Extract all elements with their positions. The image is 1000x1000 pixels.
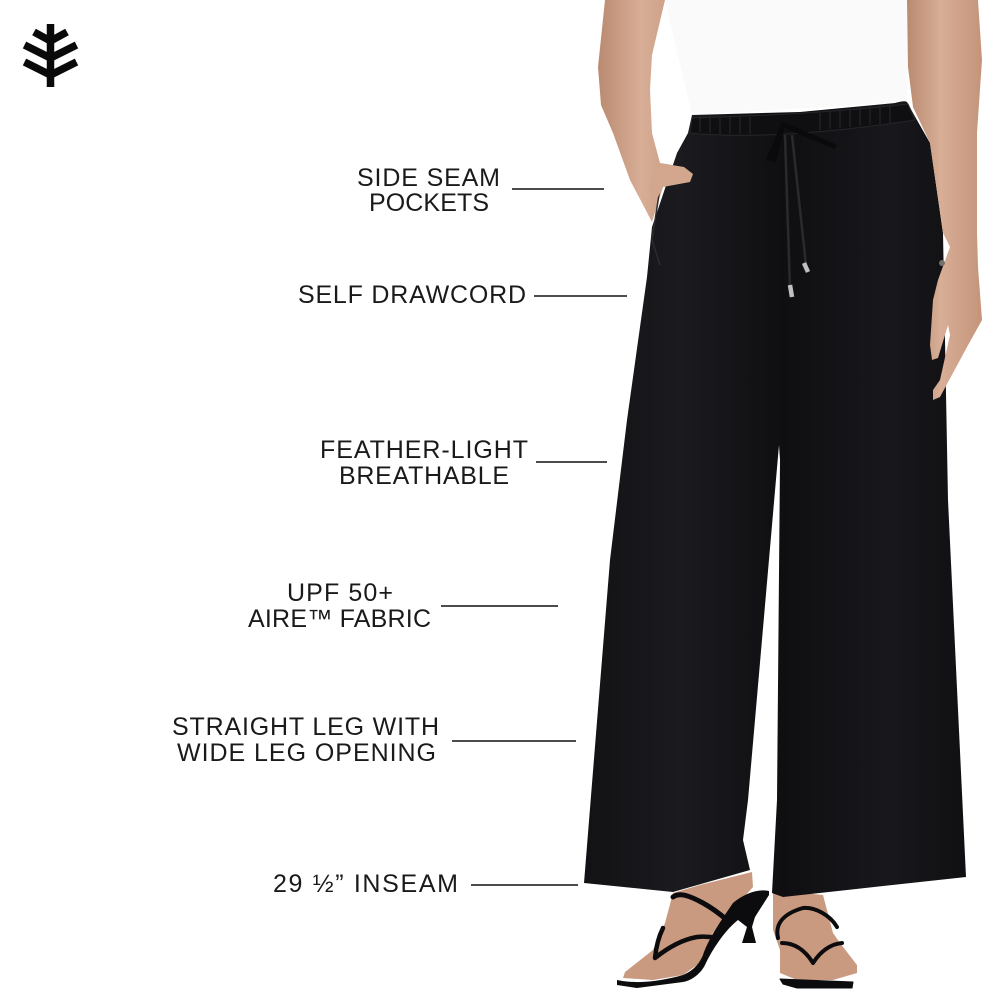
callout: side seam pockets: SIDE SEAM [357,164,500,192]
right foot [773,890,857,980]
left foot [623,872,753,980]
callout: feather-light breathable [320,436,607,490]
black wide leg pants [584,101,966,897]
left sandal [617,890,769,988]
callout: straight leg with wide leg opening: STRAIGHT LEG WITH [172,713,439,741]
right sandal [777,908,853,988]
callout: side seam pockets [357,164,604,217]
trouser side button [939,260,945,266]
white tank top [665,0,908,115]
pocket hand fingers [648,163,693,205]
waistband and drawcord [652,104,915,297]
callout: UPF 50+ Aire fabric [248,579,558,633]
callout: feather-light breathable: BREATHABLE [339,462,509,490]
right arm and hand in front of pants [907,0,982,400]
callout: straight leg with wide leg opening: WIDE LEG OPENING [177,739,436,767]
callout: inseam: 29 ½” INSEAM [273,870,458,898]
model figure wearing pants [584,0,982,988]
callout: UPF 50+ Aire fabric: AIRE™ FABRIC [248,605,431,633]
callout: self drawcord: SELF DRAWCORD [298,281,526,309]
callout: UPF 50+ Aire fabric: UPF 50+ [287,579,393,607]
icon: brand tree logo [24,24,76,87]
left arm and hand [598,0,693,222]
callout: straight leg with wide leg opening [172,713,576,767]
callout: side seam pockets: POCKETS [369,189,489,217]
callout: feather-light breathable: FEATHER-LIGHT [320,436,528,464]
